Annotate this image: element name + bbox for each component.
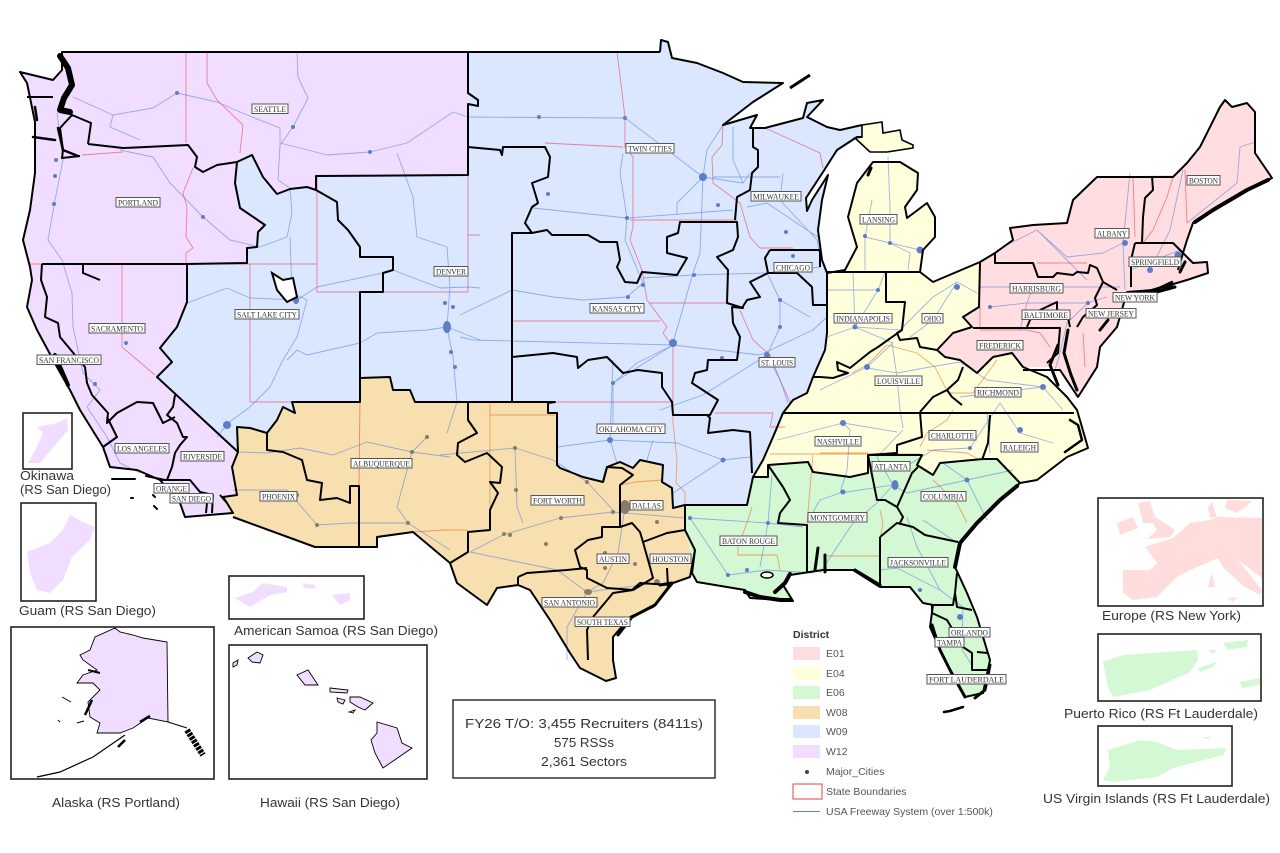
recruiting battalion labels: DENVER xyxy=(436,268,467,276)
recruiting battalion labels: ST. LOUIS xyxy=(761,358,793,368)
callout: recruiter totals: 2,361 Sectors xyxy=(541,754,628,769)
recruiting battalion labels: CHICAGO xyxy=(776,264,810,272)
callout: recruiter totals xyxy=(453,700,715,778)
major city dots xyxy=(52,91,1182,620)
recruiting battalion labels: FORT WORTH xyxy=(533,496,582,506)
recruiting battalion labels: OHIO xyxy=(924,314,941,324)
recruiting battalion labels: DALLAS xyxy=(632,502,661,510)
recruiting battalion labels: SALT LAKE CITY xyxy=(237,310,297,320)
recruiting battalion labels: PORTLAND xyxy=(118,198,158,208)
recruiting battalion labels: LANSING xyxy=(862,216,895,224)
freeway network xyxy=(48,52,1255,665)
recruiting battalion labels: ORLANDO xyxy=(951,628,988,638)
recruiting battalion labels: SAN DIEGO xyxy=(172,494,211,504)
recruiting battalion labels: MONTGOMERY xyxy=(810,514,865,522)
recruiting battalion labels: SAN ANTONIO xyxy=(544,598,595,608)
recruiting battalion labels: NEW JERSEY xyxy=(1088,310,1134,318)
recruiting battalion labels: FREDERICK xyxy=(979,342,1021,350)
recruiting battalion labels: HARRISBURG xyxy=(1012,284,1061,294)
recruiting battalion labels: BOSTON xyxy=(1189,176,1218,186)
recruiting battalion labels: JACKSONVILLE xyxy=(890,558,946,568)
inset: Okinawa: (RS San Diego) xyxy=(20,482,111,497)
inset: Europe xyxy=(1098,498,1263,623)
legend xyxy=(793,629,993,818)
inset: Okinawa xyxy=(20,413,111,497)
recruiting battalion labels: HOUSTON xyxy=(652,555,689,564)
southwest city dots xyxy=(291,435,660,595)
legend: W08 xyxy=(826,707,848,719)
recruiting battalion labels: RALEIGH xyxy=(1003,444,1036,452)
recruiting battalion labels: NEW YORK xyxy=(1115,294,1155,302)
recruiting battalion labels: FORT LAUDERDALE xyxy=(929,676,1004,684)
recruiting battalion labels: CHARLOTTE xyxy=(931,432,974,440)
recruiting battalion labels: LOS ANGELES xyxy=(117,444,167,454)
legend: Major_Cities xyxy=(826,766,884,778)
recruiting battalion labels: COLUMBIA xyxy=(923,492,964,502)
region: W08 southwest xyxy=(223,377,695,681)
inset: Hawaii xyxy=(229,645,427,810)
inner borders: southeast xyxy=(768,455,988,670)
recruiting battalion labels: BATON ROUGE xyxy=(722,537,775,546)
inset: American Samoa xyxy=(229,576,438,638)
recruiting battalion labels: BALTIMORE xyxy=(1024,311,1068,320)
recruiting battalion labels: ORANGE xyxy=(156,484,187,494)
thick coastlines xyxy=(33,56,1268,712)
inner borders: west xyxy=(27,97,237,513)
callout: recruiter totals: FY26 T/O: 3,455 Recruiters (8411s) xyxy=(465,716,703,731)
inset: Alaska: Alaska (RS Portland) xyxy=(52,795,180,810)
recruiting battalion labels: SAN FRANCISCO xyxy=(39,356,99,365)
Lake Pontchartrain xyxy=(761,572,773,578)
inset: Europe: Europe (RS New York) xyxy=(1102,608,1241,623)
region: E04 upper peninsula xyxy=(855,122,913,152)
legend: USA Freeway System (over 1:500k) xyxy=(826,806,993,818)
recruiting battalion labels: LOUISVILLE xyxy=(877,377,920,386)
inset: Puerto Rico: Puerto Rico (RS Ft Lauderdale) xyxy=(1064,706,1258,721)
region: W12 west coast xyxy=(20,52,478,517)
inset: Guam xyxy=(19,503,156,618)
recruiting battalion labels: MILWAUKEE xyxy=(753,192,799,202)
inset: Guam: Guam (RS San Diego) xyxy=(19,603,156,618)
recruiting battalion labels: SEATTLE xyxy=(254,105,286,114)
recruiting battalion labels: SACRAMENTO xyxy=(91,324,143,334)
inset: Alaska xyxy=(11,627,214,810)
state boundaries on orange, green, yellow and pink xyxy=(413,170,1187,570)
recruiting battalion labels: AUSTIN xyxy=(599,555,627,564)
recruiting battalion labels: SPRINGFIELD xyxy=(1131,258,1179,267)
legend: E01 xyxy=(826,648,845,660)
recruiting battalion labels: TAMPA xyxy=(937,638,962,648)
legend: State Boundaries xyxy=(826,786,907,798)
recruiting battalion labels: RIVERSIDE xyxy=(183,452,222,462)
inner borders: Ohio valley and mid-Atlantic xyxy=(783,272,1074,460)
legend: W12 xyxy=(826,746,848,758)
inner borders: southwest xyxy=(267,433,359,547)
legend: E04 xyxy=(826,668,845,680)
recruiting battalion labels: NASHVILLE xyxy=(817,438,859,446)
inset: US Virgin Islands xyxy=(1043,726,1270,806)
recruiting battalion labels: SOUTH TEXAS xyxy=(577,618,628,627)
recruiting battalion labels: RICHMOND xyxy=(977,388,1019,398)
region: E06 southeast xyxy=(685,455,1020,697)
recruiting battalion labels xyxy=(37,104,1220,684)
legend: W09 xyxy=(826,726,848,738)
callout: recruiter totals: 575 RSSs xyxy=(554,735,614,750)
region: W09 central xyxy=(157,40,862,508)
recruiting battalion labels: ALBANY xyxy=(1097,230,1127,238)
recruiting battalion labels: OKLAHOMA CITY xyxy=(599,425,663,434)
recruiting battalion labels: ATLANTA xyxy=(874,462,908,472)
inset: US Virgin Islands: US Virgin Islands (RS Ft Lauderdale) xyxy=(1043,791,1270,806)
recruiting battalion labels: PHOENIX xyxy=(262,492,295,502)
inset: American Samoa: American Samoa (RS San Diego) xyxy=(234,623,438,638)
region: E01 northeast xyxy=(937,100,1272,397)
recruiting battalion labels: KANSAS CITY xyxy=(592,304,642,314)
inset: Okinawa: Okinawa xyxy=(20,468,75,483)
legend: District xyxy=(793,629,830,641)
recruiting battalion labels: ALBUQUERQUE xyxy=(353,460,410,468)
Great Salt Lake xyxy=(272,273,297,302)
district boundaries xyxy=(20,40,1272,697)
recruiting battalion labels: INDIANAPOLIS xyxy=(836,314,890,324)
recruiting battalion labels: TWIN CITIES xyxy=(628,144,672,154)
Isle Royale xyxy=(790,75,810,88)
inset: Puerto Rico xyxy=(1064,634,1261,721)
legend: E06 xyxy=(826,687,845,699)
region: E04 lower Michigan to Carolinas xyxy=(753,162,1088,483)
state boundaries xyxy=(30,52,823,486)
inset: Hawaii: Hawaii (RS San Diego) xyxy=(260,795,400,810)
